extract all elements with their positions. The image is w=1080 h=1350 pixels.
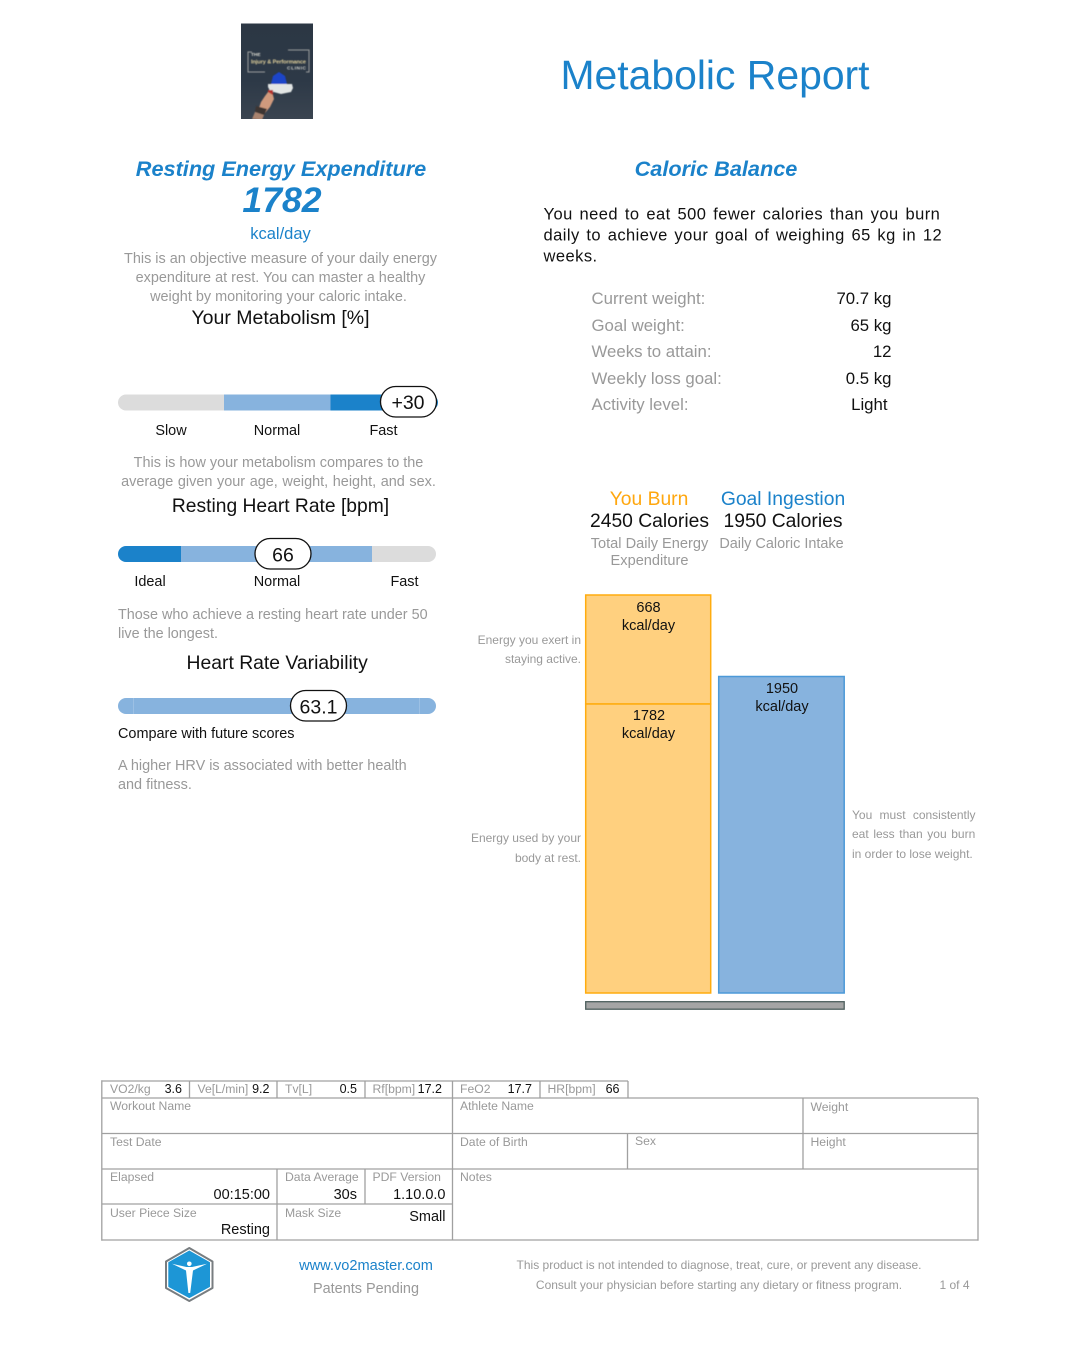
caption: Compare with future scores	[118, 726, 295, 742]
metric row: VO2/kg	[110, 1082, 151, 1096]
note: eat less: in order to lose weight.	[852, 847, 973, 861]
metric row: FeO2	[460, 1082, 491, 1096]
panel: your metabolism	[118, 307, 438, 490]
description: and fitness.	[118, 777, 192, 793]
session row: Notes	[460, 1170, 492, 1184]
gauge labels: Normal	[254, 574, 300, 590]
column header: you burn: 2450 Calories	[590, 511, 709, 532]
bar: goal ingestion 1950: 1950	[766, 681, 798, 697]
stats list: 12	[873, 342, 892, 361]
table grid	[102, 1080, 978, 1241]
column header: goal ingestion: 1950 Calories	[724, 511, 842, 532]
session row: 1.10.0.0	[393, 1187, 446, 1203]
note: active energy	[478, 633, 581, 666]
bar: active energy 668: kcal/day	[622, 618, 676, 634]
panel: resting energy expenditure	[124, 156, 438, 305]
session row: 00:15:00	[214, 1187, 270, 1203]
test date row: Height	[810, 1135, 846, 1149]
column header: you burn	[590, 489, 709, 569]
note: resting energy: body at rest.	[515, 851, 581, 865]
bar: resting energy 1782: kcal/day	[622, 726, 676, 742]
metric row: 0.5	[340, 1082, 357, 1096]
note: eat less: eat less than you burn	[852, 827, 975, 841]
column header: goal ingestion: Daily Caloric Intake	[719, 536, 844, 552]
size row: Resting	[221, 1222, 270, 1238]
heading: resting energy expenditure: Resting Energy Expenditure	[136, 156, 426, 181]
gauge labels: Fast	[369, 423, 398, 439]
paragraph: weeks.	[542, 248, 598, 266]
footer: website	[298, 1258, 433, 1297]
stats list: 0.5 kg	[846, 369, 892, 388]
description	[118, 607, 428, 642]
size row: Small	[409, 1209, 446, 1225]
title: Metabolic Report	[560, 52, 870, 98]
stats list: 70.7 kg	[836, 289, 892, 308]
workout row: Weight	[810, 1100, 849, 1114]
description: This is an objective measure of your daily energy	[124, 251, 438, 267]
note: resting energy	[471, 831, 581, 865]
gauge: heart rate: 66	[272, 544, 294, 566]
footer: website: Patents Pending	[313, 1281, 419, 1297]
metric row: Rf[bpm]	[372, 1082, 415, 1096]
panel: heart rate variability	[118, 652, 436, 793]
footer: page number: 1 of 4	[939, 1278, 970, 1292]
photo: clinic sign with hand holding mask: Injury & Performance	[251, 60, 306, 66]
gauge: hrv: 63.1	[300, 696, 337, 718]
gauge labels	[134, 574, 419, 590]
panel: caloric balance	[542, 156, 942, 414]
bar: active energy 668: 668	[636, 600, 661, 616]
metric row	[110, 1082, 620, 1096]
panel: resting heart rate	[118, 496, 436, 642]
stats list: Current weight:	[592, 289, 705, 308]
test date row	[110, 1134, 846, 1149]
metric row: Ve[L/min]	[198, 1082, 248, 1096]
column header: goal ingestion: Goal Ingestion	[721, 489, 845, 510]
footer: disclaimer: This product is not intended to diagnose, treat, cure, or prevent any disease.	[517, 1258, 921, 1272]
column header: goal ingestion	[719, 489, 845, 552]
note: eat less	[852, 808, 976, 861]
chart: you burn vs goal ingestion	[471, 489, 976, 1009]
gauge labels: Fast	[390, 574, 419, 590]
photo: clinic sign with hand holding mask: THE	[251, 52, 261, 58]
description	[124, 251, 438, 305]
description: live the longest.	[118, 626, 218, 642]
gauge labels	[155, 423, 398, 439]
note: active energy: Energy you exert in	[478, 633, 581, 647]
column header: you burn: Total Daily Energy	[591, 536, 709, 552]
stats list: Weekly loss goal:	[592, 369, 722, 388]
photo: clinic sign with hand holding mask	[241, 24, 313, 120]
metric row: 17.7	[508, 1082, 532, 1096]
gauge labels: Slow	[155, 423, 187, 439]
column header: you burn: You Burn	[610, 489, 688, 510]
session row: PDF Version	[372, 1170, 441, 1184]
note: resting energy: Energy used by your	[471, 831, 581, 845]
bar: active energy 668	[586, 595, 711, 704]
description: This is how your metabolism compares to the	[134, 455, 423, 471]
heading: resting heart rate: Resting Heart Rate [bpm]	[172, 496, 389, 517]
workout row	[110, 1099, 849, 1114]
bar: goal ingestion 1950	[719, 676, 844, 993]
workout row: Workout Name	[110, 1099, 191, 1113]
description	[118, 758, 407, 793]
metric row: 3.6	[165, 1082, 182, 1096]
data table	[102, 1080, 978, 1241]
gauge: heart rate	[118, 538, 436, 569]
size row	[110, 1206, 446, 1238]
stats list: 65 kg	[850, 316, 892, 335]
session row: Data Average	[285, 1170, 359, 1184]
gauge labels: Ideal	[134, 574, 166, 590]
description: expenditure at rest. You can master a healthy	[136, 270, 426, 286]
column header: you burn: Expenditure	[611, 553, 688, 569]
stats list	[592, 289, 892, 414]
gauge labels: Normal	[254, 423, 300, 439]
bar: resting energy 1782	[586, 704, 711, 993]
heading: your metabolism: Your Metabolism [%]	[191, 307, 370, 329]
stats list: Goal weight:	[592, 316, 685, 335]
description: Those who achieve a resting heart rate under 50	[118, 607, 428, 623]
description	[121, 455, 436, 490]
stats list: Light	[851, 395, 888, 414]
session row: 30s	[334, 1187, 357, 1203]
gauge: hrv	[118, 690, 436, 721]
size row: Mask Size	[285, 1206, 341, 1220]
description: A higher HRV is associated with better health	[118, 758, 407, 774]
test date row: Sex	[635, 1134, 656, 1148]
stats list: Weeks to attain:	[592, 342, 712, 361]
footer: disclaimer	[517, 1258, 921, 1292]
paragraph: You need to eat 500 fewer calories than you burn	[544, 206, 940, 224]
heading: heart rate variability: Heart Rate Variability	[187, 652, 368, 674]
stats list: Activity level:	[592, 395, 688, 414]
photo: clinic sign with hand holding mask: CLINIC	[287, 66, 307, 72]
unit: kcal/day	[250, 225, 312, 243]
metric row: 9.2	[252, 1082, 270, 1096]
description: average given your age, weight, height, and sex.	[121, 474, 436, 490]
paragraph	[542, 206, 942, 266]
metric row: 66	[606, 1082, 620, 1096]
heading: caloric balance: Caloric Balance	[635, 156, 797, 181]
test date row: Test Date	[110, 1135, 162, 1149]
bar: goal ingestion 1950: kcal/day	[755, 699, 809, 715]
note: active energy: staying active.	[505, 652, 581, 666]
description: weight by monitoring your caloric intake.	[149, 289, 407, 305]
metric row: Tv[L]	[285, 1082, 312, 1096]
metric row: HR[bpm]	[548, 1082, 596, 1096]
bar: resting energy 1782: 1782	[633, 708, 665, 724]
note: eat less: You must consistently	[852, 808, 976, 822]
gauge: metabolism	[118, 386, 438, 417]
icon: vo2 master logo	[166, 1248, 212, 1301]
footer: disclaimer: Consult your physician before starting any dietary or fitness program.	[536, 1278, 902, 1292]
metric row: 17.2	[418, 1082, 442, 1096]
chart baseline	[586, 1002, 844, 1009]
session row: Elapsed	[110, 1170, 154, 1184]
value: 1782: 1782	[242, 180, 322, 220]
workout row: Athlete Name	[460, 1099, 534, 1113]
size row: User Piece Size	[110, 1206, 197, 1220]
session row	[110, 1170, 492, 1203]
gauge: metabolism: +30	[391, 392, 425, 414]
paragraph: daily to achieve your goal of weighing 65 kg in 12	[544, 226, 942, 244]
test date row: Date of Birth	[460, 1135, 528, 1149]
footer: website: www.vo2master.com	[298, 1258, 433, 1274]
